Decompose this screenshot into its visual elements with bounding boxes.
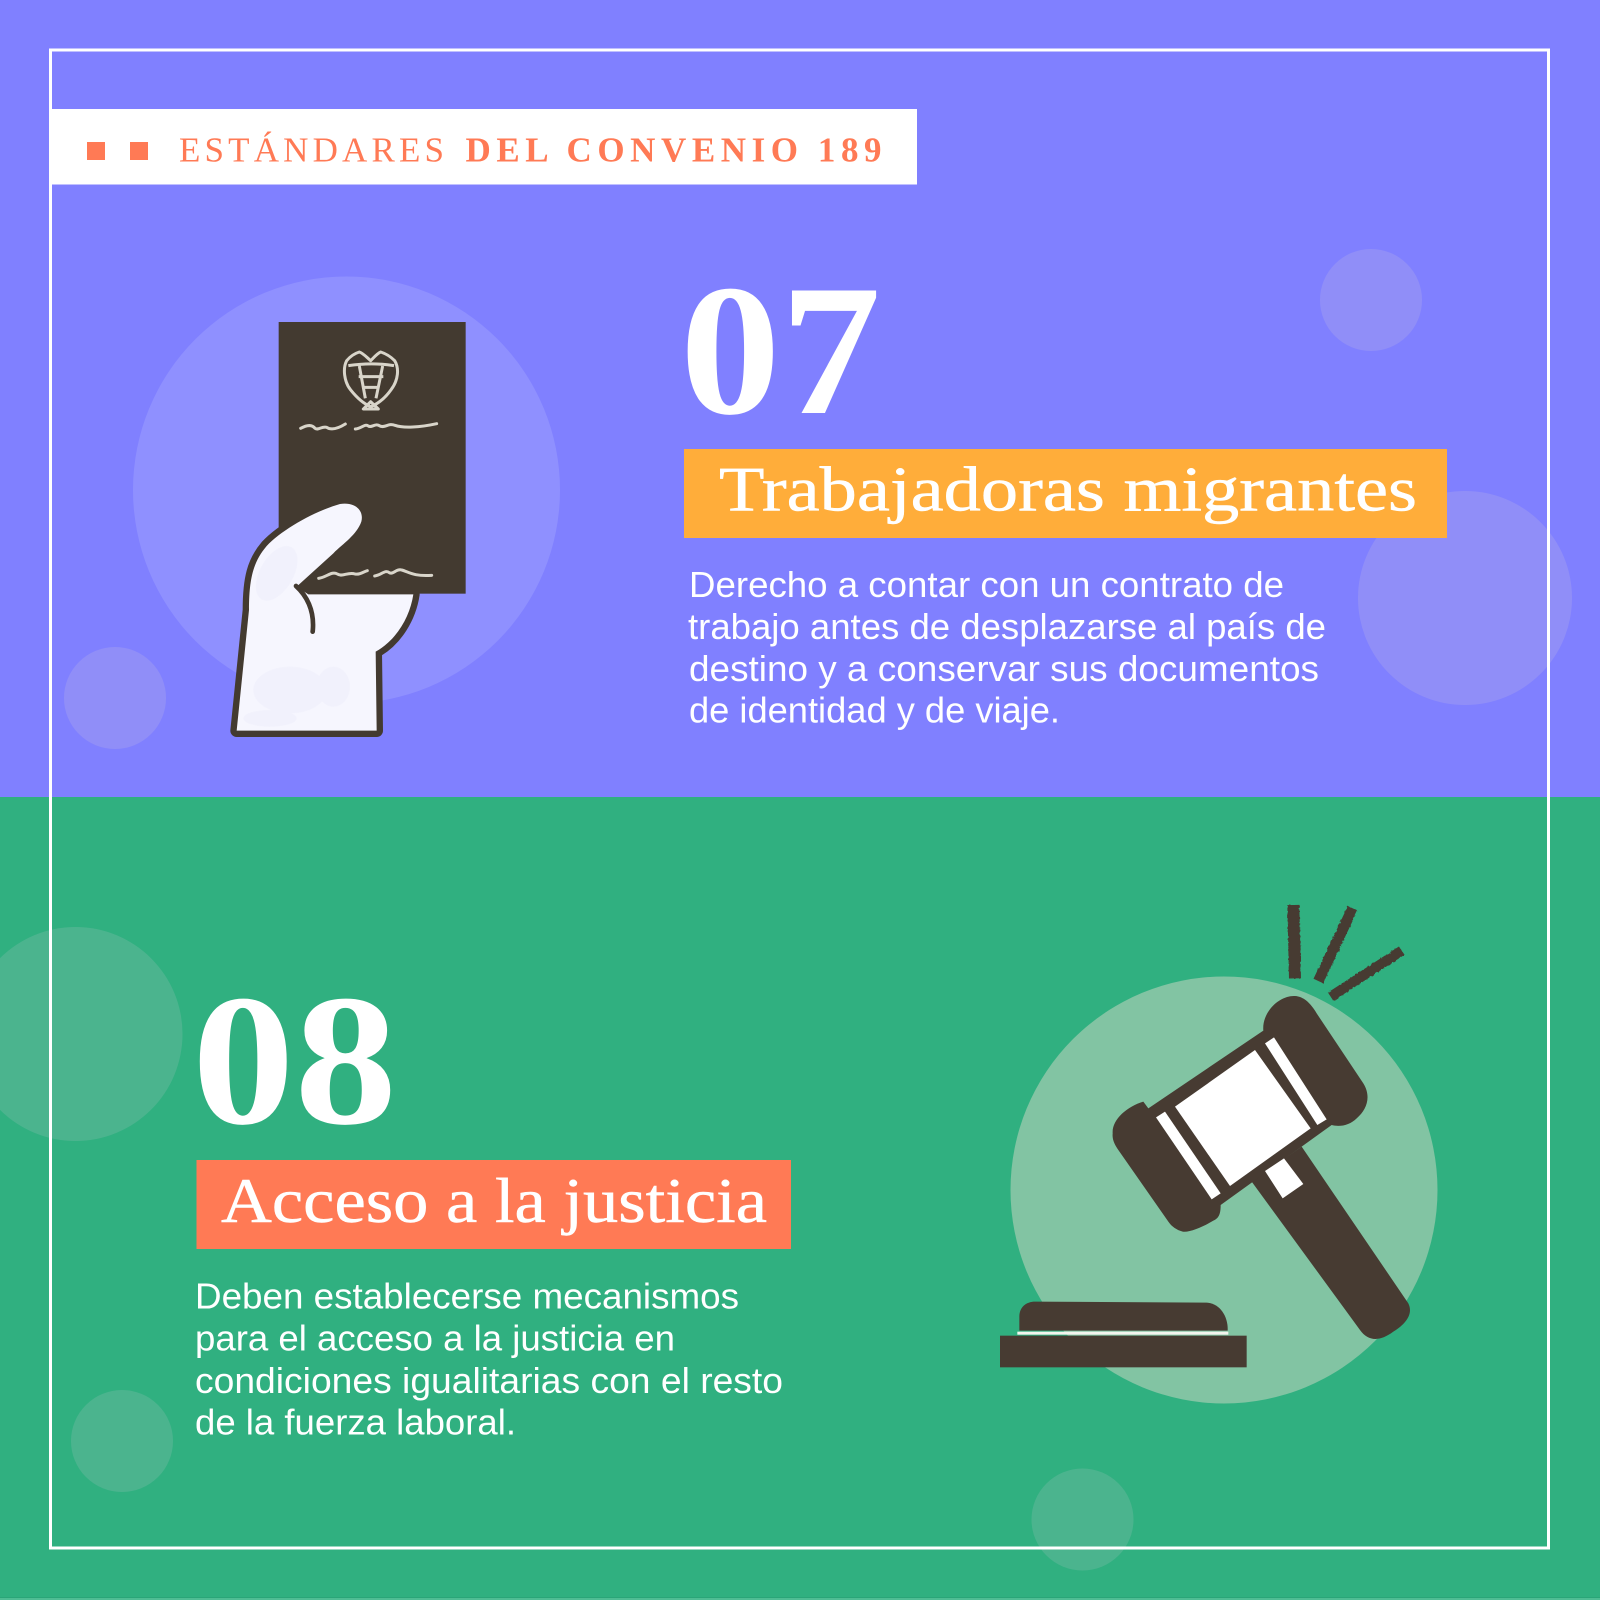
text block: section 07: Derecho a contar con un contrato de [689,564,1284,605]
hand fill [237,504,413,731]
text block: section 08: condiciones igualitarias con el resto [195,1360,783,1401]
decorative circles: green section [0,927,1134,1570]
hand outline [237,504,413,731]
hand texture [243,539,350,727]
gavel white bands [1156,1037,1327,1199]
heading: Acceso a la justicia [196,1160,791,1249]
gavel head [1113,996,1368,1232]
passport text squiggles [301,424,437,578]
heading: Trabajadoras migrantes: Trabajadoras migrantes [719,454,1417,524]
panel: purple section background [0,0,1600,797]
number 08: 08 [192,957,397,1164]
thumb crease [296,586,313,632]
text block: section 07 [688,564,1326,730]
number 07: 07 [680,247,881,454]
text block: section 07: destino y a conservar sus documentos [689,648,1319,689]
icon: hand holding passport with circle [133,276,560,731]
decorative circles: purple section [64,249,1572,749]
text block: section 07: de identidad y de viaje. [689,690,1060,730]
panel: green section background [0,797,1600,1600]
text block: section 08: Deben establecerse mecanismos [195,1276,739,1316]
text block: section 08: para el acceso a la justicia en [195,1318,675,1358]
header banner: DEL CONVENIO 189 [466,130,882,170]
passport emblem [344,352,398,409]
text block: section 08: de la fuerza laboral. [195,1402,516,1442]
heading: Trabajadoras migrantes [684,449,1447,538]
passport cover [279,322,466,594]
heading: Acceso a la justicia: Acceso a la justicia [221,1165,767,1236]
impact lines [1293,905,1402,997]
sound block [1019,1302,1228,1331]
text block: section 08 [195,1276,783,1442]
header banner: ESTÁNDARES [179,130,444,170]
icon: gavel with circle [1000,905,1438,1404]
text block: section 07: trabajo antes de desplazarse al país de [688,606,1326,647]
gavel handle [1252,1147,1410,1339]
header banner [51,109,917,184]
